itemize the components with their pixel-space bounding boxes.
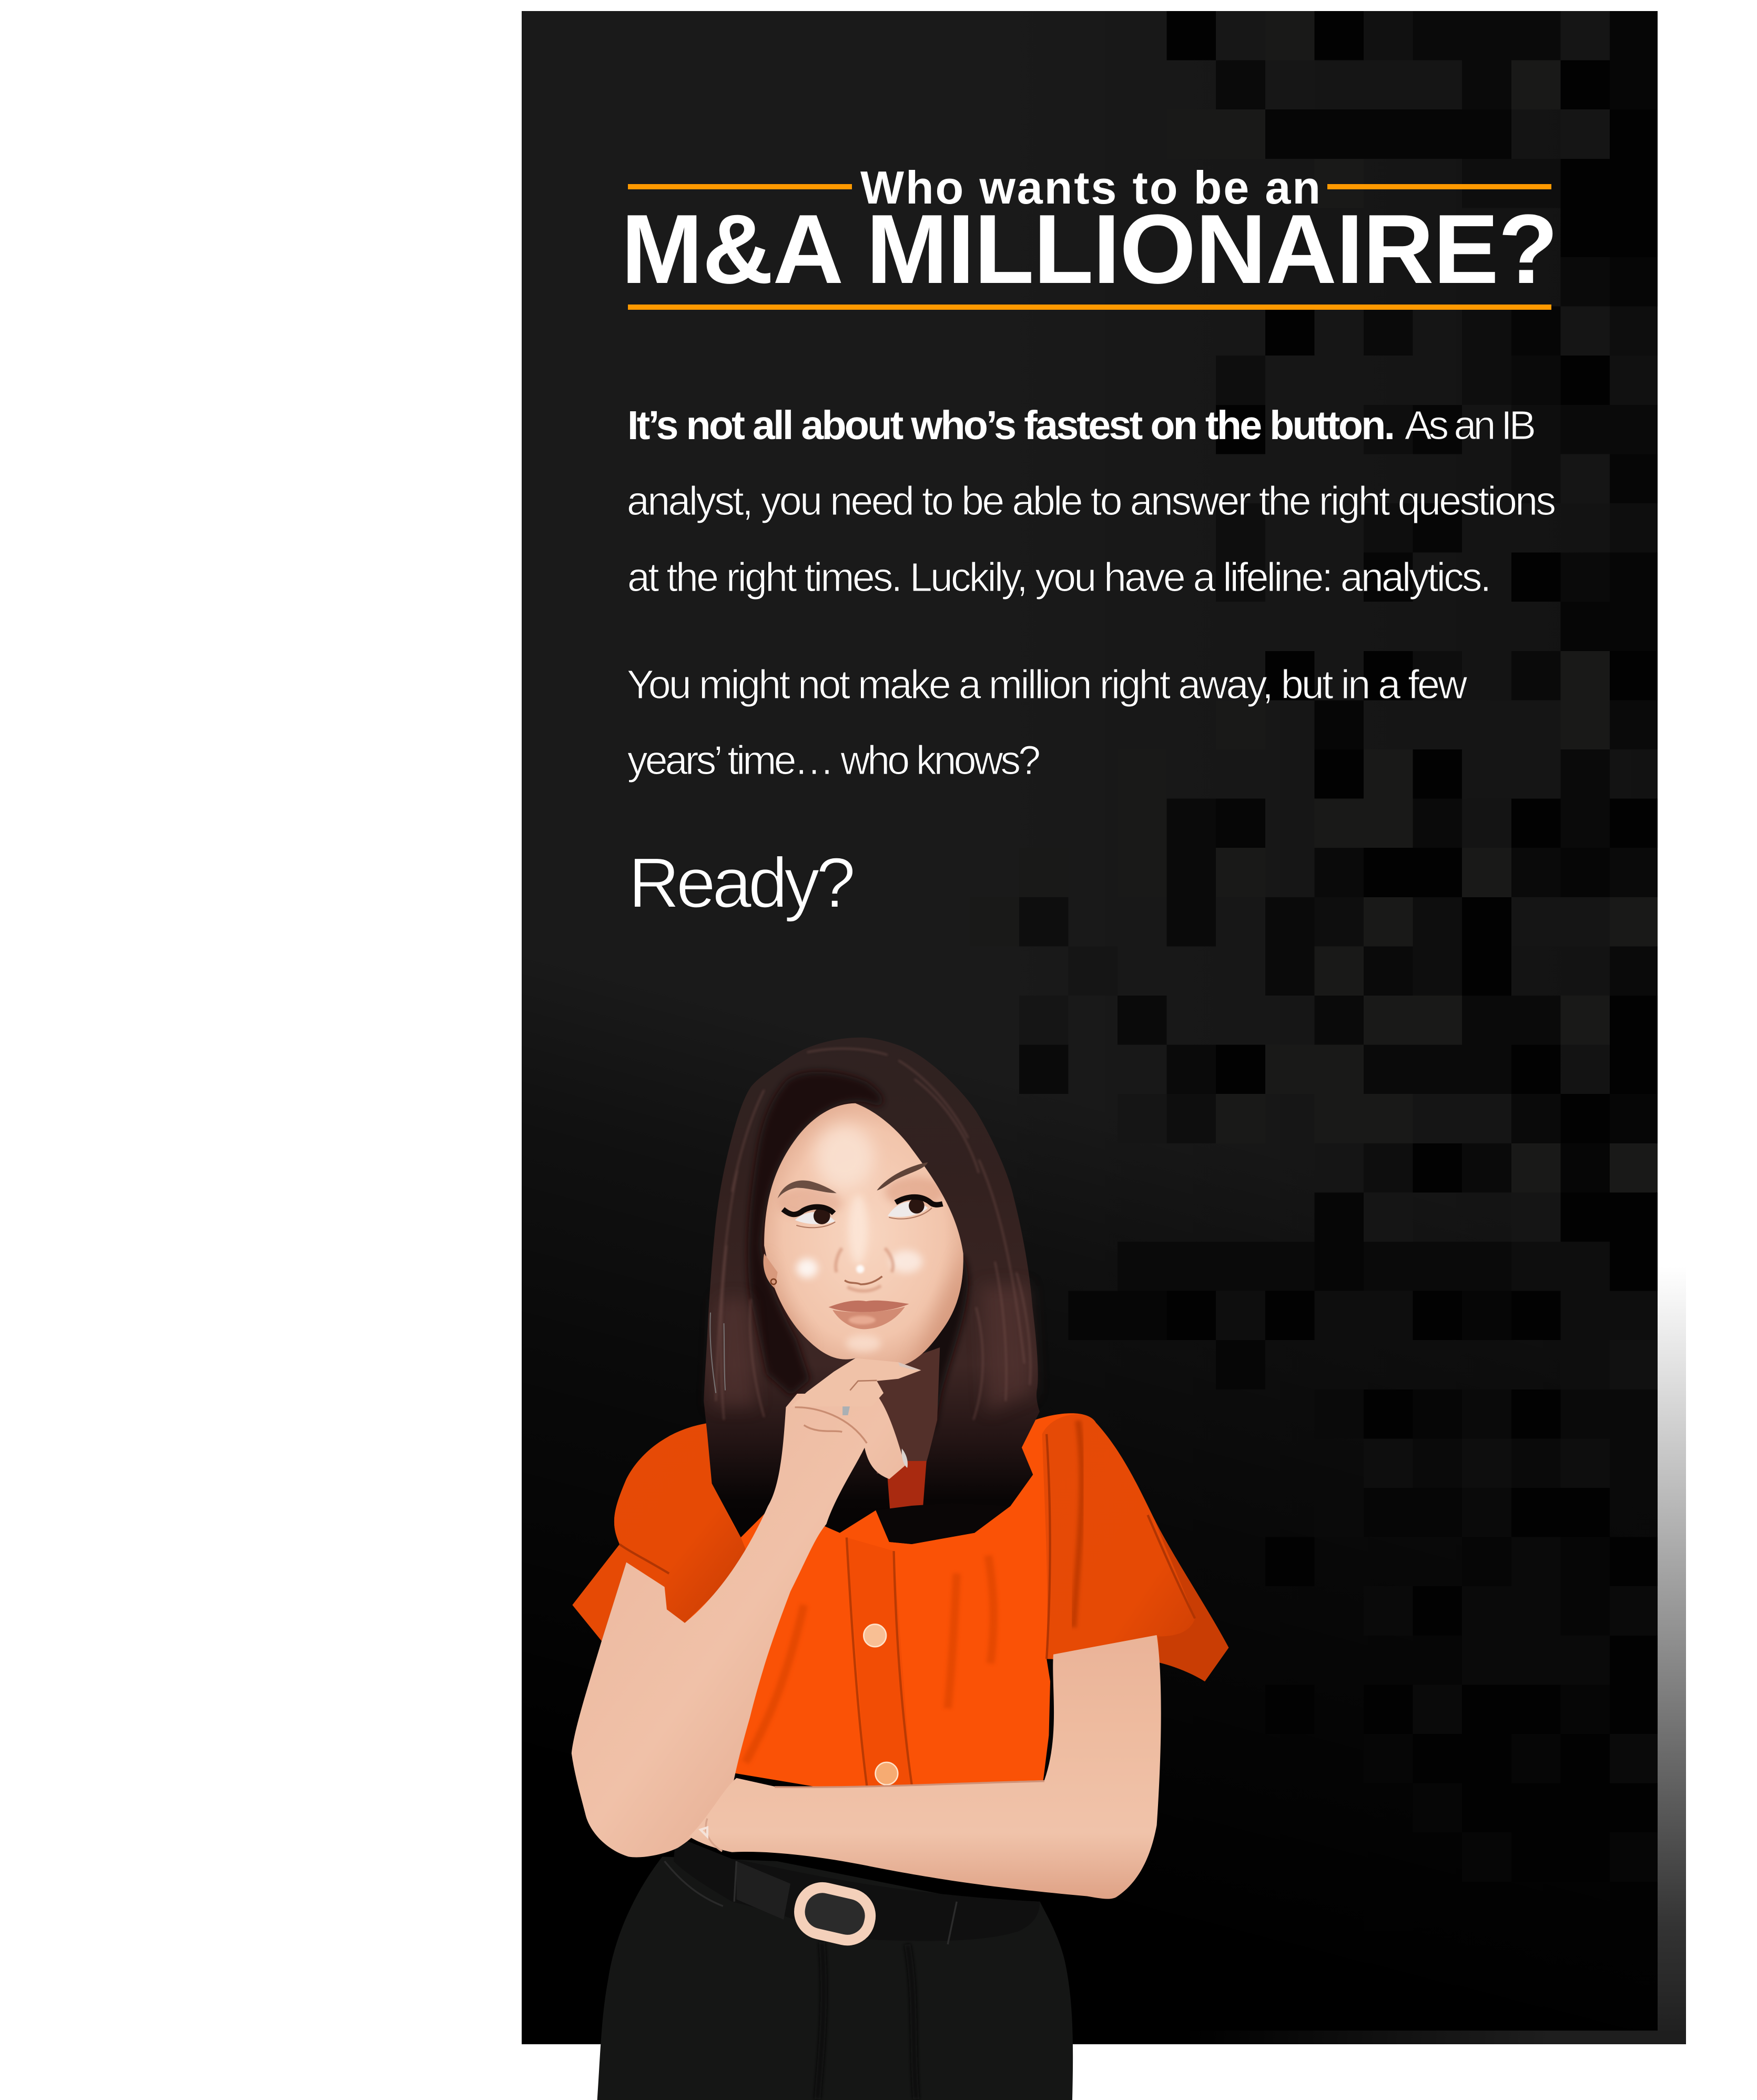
finger under chin [791, 1358, 921, 1406]
eye: right [888, 1197, 942, 1219]
right and bottom gradient shadow [522, 1266, 1686, 2044]
body text: first paragraph: at the right times. Luckily, you have a lifeline: analytics. [627, 555, 1491, 600]
lips [832, 1306, 905, 1329]
ring [842, 1403, 851, 1415]
title: M&A millionaire: M&A MILLIONAIRE? [621, 194, 1558, 304]
face [764, 1103, 968, 1374]
body text: first paragraph [627, 403, 1556, 600]
bracelet [706, 1819, 722, 1851]
blouse neckline [886, 1461, 927, 1514]
blouse [572, 1413, 1228, 1794]
panel: dark pixel background [522, 11, 1659, 2031]
heading rule: left [628, 184, 852, 189]
person: woman thinking [572, 1038, 1228, 2100]
body text: first paragraph: It’s not all about who’s fastest on the button. [627, 403, 1395, 448]
hair [704, 1038, 1040, 1544]
prompt: ready: Ready? [628, 843, 856, 922]
heading rule: bottom [628, 305, 1551, 310]
shirt placket [847, 1538, 912, 1790]
body text: first paragraph: analyst, you need to be able to answer the right questions [627, 479, 1556, 524]
fingernail [902, 1448, 908, 1468]
arm: left with hand [572, 1394, 908, 1857]
ear and earring [764, 1253, 778, 1289]
hair tips over neckline [876, 1503, 1010, 1544]
eye: left [783, 1207, 835, 1227]
arm: crossed forearm [689, 1635, 1161, 1899]
shirt buttons [864, 1624, 886, 1647]
sleeve: right [1042, 1414, 1228, 1681]
eyebrows [778, 1180, 837, 1199]
nose [845, 1276, 882, 1284]
heading: who wants to be an: Who wants to be an [860, 161, 1321, 214]
body text: second paragraph [627, 662, 1467, 783]
face shading [764, 1125, 968, 1374]
sleeve: left [572, 1423, 750, 1641]
body text: second paragraph: years’ time… who knows? [627, 738, 1041, 783]
body text: second paragraph: You might not make a million right away, but in a few [627, 662, 1467, 707]
body text: first paragraph: As an IB [1405, 403, 1536, 448]
heading rule: right [1327, 184, 1551, 189]
trousers [597, 1856, 1073, 2100]
belt and buckle [674, 1837, 1040, 1945]
neck [871, 1347, 940, 1514]
